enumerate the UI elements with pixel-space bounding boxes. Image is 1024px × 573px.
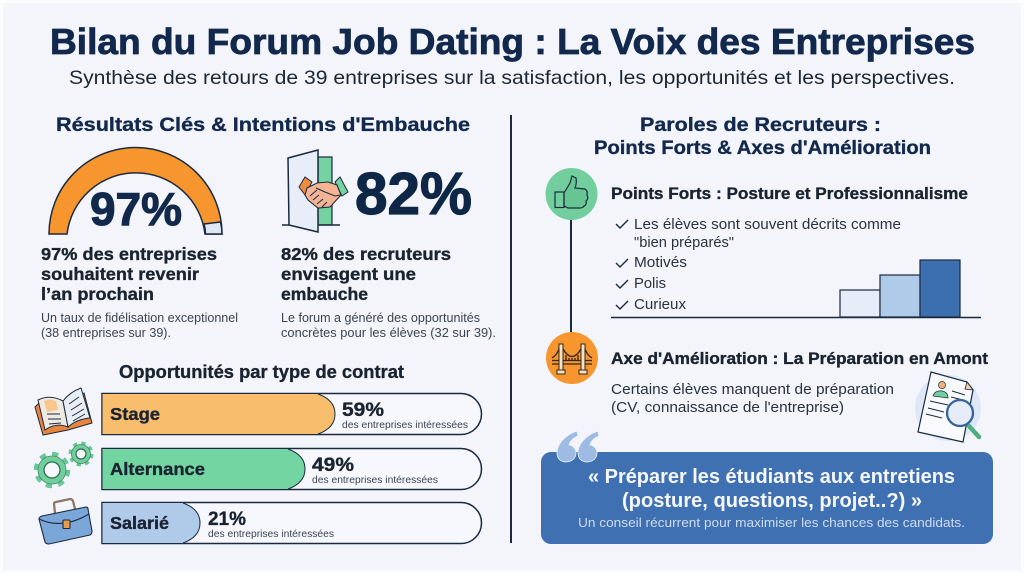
stat detail: Le forum a généré des opportunités bbox=[281, 311, 480, 325]
check list bbox=[616, 217, 901, 313]
bar: Stage: Stage bbox=[110, 404, 160, 424]
quote text: (posture, questions, projet..?) » bbox=[622, 490, 922, 512]
improvement text: Certains élèves manquent de préparation bbox=[611, 382, 894, 398]
strengths heading: Points Forts : Posture et Professionnalisme bbox=[611, 185, 968, 203]
icon: bridge bbox=[546, 332, 598, 384]
title: Bilan du Forum Job Dating : La Voix des Entreprises bbox=[50, 21, 975, 62]
quote text bbox=[588, 466, 955, 512]
gauge chart bbox=[49, 148, 222, 234]
bar: Stage bbox=[102, 394, 482, 434]
bar: Salarié: Salarié bbox=[110, 513, 169, 533]
heading: contract types: Opportunités par type de contrat bbox=[119, 362, 404, 382]
stat heading bbox=[281, 244, 451, 304]
stat heading: 97% des entreprises bbox=[41, 244, 217, 264]
improvement text bbox=[611, 382, 894, 416]
check list: Les élèves sont souvent décrits comme bbox=[634, 217, 901, 233]
stat detail: (38 entreprises sur 39). bbox=[41, 326, 171, 340]
stat heading bbox=[41, 244, 217, 304]
heading: key results: Résultats Clés & Intentions d'Embauche bbox=[56, 114, 470, 136]
stat heading: envisagent une bbox=[281, 264, 416, 284]
small bar chart bbox=[611, 260, 981, 318]
bar: Salarié bbox=[102, 502, 482, 544]
quote caption: Un conseil récurrent pour maximiser les chances des candidats. bbox=[578, 516, 965, 530]
heading: recruiters: Paroles de Recruteurs : bbox=[640, 114, 881, 136]
big value: 82% bbox=[355, 161, 472, 227]
panel: improvement bbox=[611, 350, 989, 442]
icon: briefcase bbox=[39, 499, 92, 544]
icon: CV with magnifier bbox=[915, 372, 981, 442]
icon: thumbs up bbox=[546, 168, 598, 220]
stat detail bbox=[41, 311, 238, 340]
bar: Stage: des entreprises intéressées bbox=[342, 419, 468, 431]
bar: Salarié: des entreprises intéressées bbox=[208, 528, 334, 540]
stat heading: l’an prochain bbox=[41, 284, 154, 304]
timeline connector bbox=[570, 218, 572, 334]
icon: open book bbox=[35, 388, 92, 435]
panel: strengths bbox=[611, 185, 981, 318]
bar: Alternance bbox=[102, 448, 482, 490]
panel: 97% stat bbox=[41, 148, 238, 340]
stat heading: souhaitent revenir bbox=[41, 264, 199, 284]
stat detail bbox=[281, 311, 496, 340]
check list: Curieux bbox=[634, 297, 687, 313]
bar: Alternance: des entreprises intéressées bbox=[312, 474, 438, 486]
panel: 82% stat bbox=[281, 150, 496, 340]
heading: recruiters bbox=[594, 114, 931, 159]
quote text: « Préparer les étudiants aux entretiens bbox=[588, 466, 955, 488]
gauge value: 97% bbox=[90, 183, 182, 235]
heading: recruiters: Points Forts & Axes d'Amélioration bbox=[594, 137, 931, 159]
check list: Polis bbox=[634, 276, 666, 292]
bar: Alternance: 49% bbox=[312, 455, 354, 476]
panel: quote callout bbox=[541, 431, 993, 544]
icon: door and handshake bbox=[282, 150, 348, 232]
bar: Stage: 59% bbox=[342, 400, 384, 421]
icon: quote marks bbox=[557, 431, 599, 462]
icon: gears bbox=[36, 444, 92, 486]
stat heading: 82% des recruteurs bbox=[281, 244, 451, 264]
panel: contract bars bbox=[102, 394, 482, 544]
subtitle: Synthèse des retours de 39 entreprises sur la satisfaction, les opportunités et les perspectives. bbox=[69, 67, 955, 89]
check list: "bien préparés" bbox=[634, 235, 734, 251]
bar: Salarié: 21% bbox=[208, 509, 246, 530]
improvement text: (CV, connaissance de l'entreprise) bbox=[611, 400, 844, 416]
stat detail: Un taux de fidélisation exceptionnel bbox=[41, 311, 238, 325]
column divider bbox=[510, 115, 512, 543]
bar: Alternance: Alternance bbox=[110, 459, 205, 479]
improvement heading: Axe d'Amélioration : La Préparation en Amont bbox=[611, 350, 989, 368]
stat heading: embauche bbox=[281, 284, 368, 304]
stat detail: concrètes pour les élèves (32 sur 39). bbox=[281, 326, 496, 340]
check list: Motivés bbox=[634, 255, 687, 271]
